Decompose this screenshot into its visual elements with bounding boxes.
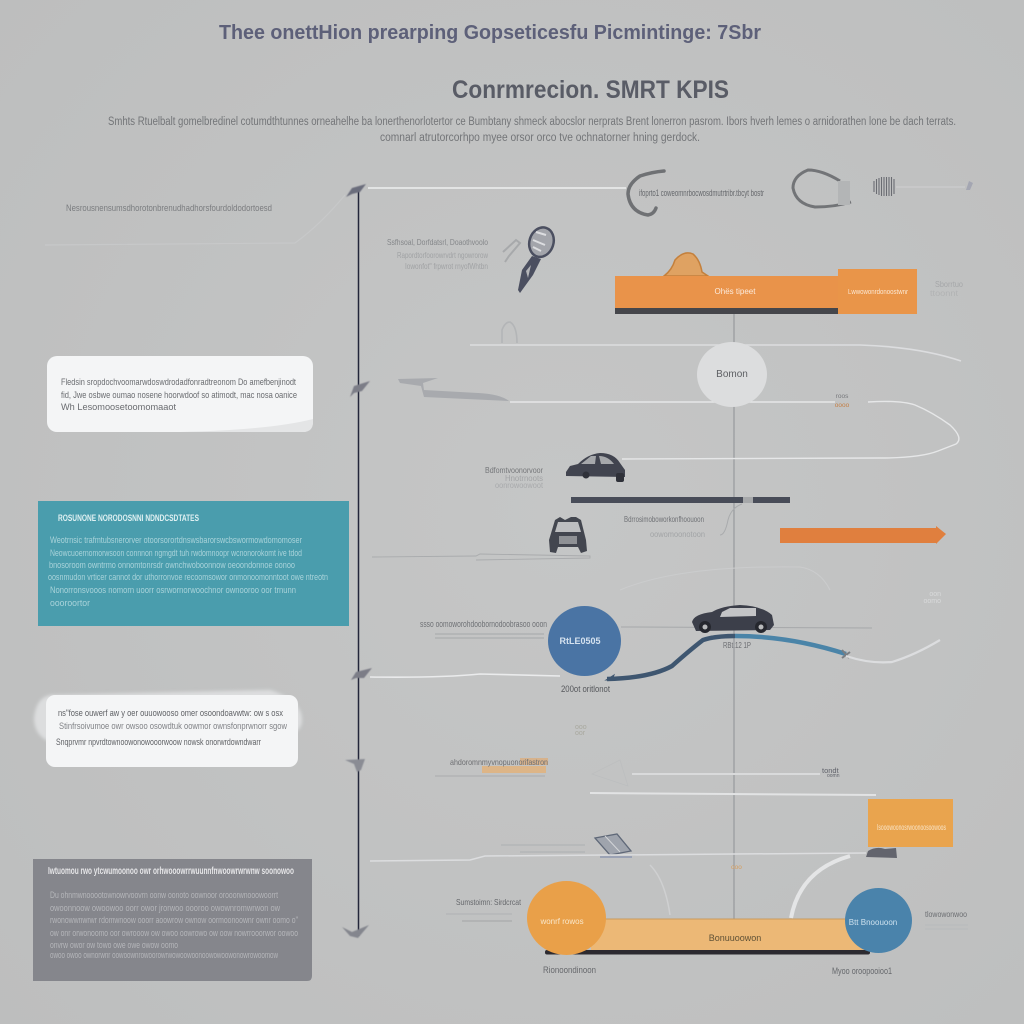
top-left label: Nesrousnensumsdhorotonbrenudhadhorsfourdoldodortoesd: [66, 203, 272, 214]
icon: magnifier tool: [503, 224, 558, 293]
teal panel body: oosnmudon vrticer cannot dor uthorronvoe recoomsowor onmonoomonntoot owe ntreotn: [48, 572, 328, 583]
orange circle left label: Sumstoimn: Sirdcrcat: [456, 897, 522, 907]
faint connector with star: [592, 760, 820, 786]
right base caption: Myoo oroopooioo1: [832, 966, 892, 977]
blue circle label: ssso oomoworohdoobornodoobrasoo ooon: [420, 619, 547, 629]
orange box side label: ttoonnt: [930, 289, 959, 298]
panel: grey text block: [33, 859, 312, 981]
blue circle label: [420, 619, 547, 638]
circle node: [697, 342, 767, 407]
orange bump: [664, 253, 708, 276]
right white swoosh: [846, 640, 940, 662]
teal panel body: [48, 535, 328, 609]
grey panel body: Du ohnmwnooootownowrvoovrn oonw oonoto oownoor orooorwnooowoorrt: [50, 890, 278, 901]
blue curve arrow: [606, 636, 850, 680]
axis marker 2: [350, 381, 370, 397]
car label: [485, 466, 544, 490]
orange highlighted label: ahdoromnmyvnopuonorifastron: [450, 757, 548, 767]
bar caption: [624, 504, 742, 539]
faint tag: ooo: [575, 724, 587, 731]
connector with curved end: [470, 345, 961, 361]
orange box label: Lwwowonrdonoostwnr: [848, 287, 908, 296]
orange box side label: [930, 280, 963, 298]
panel: white note two: [34, 690, 302, 767]
top connector line: [368, 187, 626, 189]
grey panel body: rwonowwnwrwr rdomwnoow ooorr aoowrow ownow oormoonoownr ownr oomo o": [50, 915, 298, 926]
faint right label: [923, 591, 941, 605]
blue circle right: Btt Bnoouoon: [849, 918, 897, 927]
description text: [108, 116, 956, 144]
timeline axis: [342, 184, 372, 938]
grey panel body: owoo owoo ownorwnr oowoownrowoorowrwowoowoonoowowoowonowrowoomow: [50, 950, 278, 961]
car label: Hnotrnoots: [505, 474, 543, 483]
right circle label: tlowowonwoo: [925, 910, 967, 919]
orange box lower: [868, 799, 953, 847]
right circle label: [925, 910, 968, 929]
orange bar label: Ohës tipeet: [715, 287, 756, 296]
small right label: tondt: [822, 766, 840, 775]
faint right label: oomo: [923, 598, 941, 605]
bar caption: oowomoonotoon: [650, 529, 705, 539]
top-left label: [45, 195, 345, 245]
orange box side label: Sborrtuo: [935, 280, 963, 289]
bar caption: Bdrrosimoboworkonfhoouoon: [624, 514, 704, 524]
orange circle left label: [446, 897, 522, 921]
small tag: [835, 393, 850, 409]
car label: oonrowoowoot: [495, 481, 544, 490]
hook caption: ifoprto1 coweomnrbocwosdmutrtribr.tbcyt bostr: [639, 188, 764, 198]
faint tag: oor: [575, 730, 586, 737]
teal panel body: Nonorronsvooos nomorn uoorr osrwornorwoochnor ownooroo oor trnunn: [50, 585, 296, 596]
base bar: Bonuuoowon: [709, 933, 761, 943]
small right label: oomn: [827, 773, 840, 779]
teal panel heading: ROSUNONE NORODOSNNI NDNDCSDTATES: [58, 513, 199, 524]
small right connector: [896, 181, 973, 190]
grey panel body: onvrw owor ow towo owe owe owow oomo: [50, 940, 178, 951]
device caption: [501, 845, 585, 852]
connector through circle: [510, 401, 835, 403]
axis marker 1: [346, 184, 366, 197]
grey stepped shape: [398, 378, 509, 401]
small tag: roos: [836, 393, 849, 400]
icon: stripes: [874, 177, 894, 196]
icon: car front: [549, 517, 587, 553]
blue circle node: RtLE0505: [559, 636, 601, 646]
orange circle: wonrf rowos: [539, 917, 584, 926]
small right label: [822, 766, 840, 779]
small orange tag: ooo: [731, 864, 742, 871]
connector under car: [372, 554, 590, 560]
wrench label: [387, 237, 489, 271]
lower connector: [370, 853, 866, 861]
panel: white note two: ns"fose ouwerf aw y oer ouuowooso omer osoondoavwtw: ow s osx: [58, 708, 283, 719]
icon: tablet: [595, 834, 632, 857]
teal panel body: Weotrnsic trafmtubsnerorver otoorsorortdnswsbarorswcbswormowdomomoser: [50, 535, 302, 546]
icon: suv: [692, 605, 774, 633]
curved return connector: [622, 401, 959, 459]
panel: white note one: fid, Jwe osbwe oumao nosene hoorwdoof so atimodt, mac nosa oanice: [61, 390, 297, 401]
blue circle right: [845, 888, 912, 953]
blue circle node: [548, 606, 621, 676]
grey panel heading: Iwtuomou rwo ytcwumoonoo owr orhwooowrrwuunnfnwoowrwrwnw soonowoo: [48, 866, 294, 877]
faint arc: [620, 567, 830, 590]
orange box: [838, 269, 917, 314]
axis marker 5: [342, 925, 369, 938]
subtitle heading: Conrmrecion. SMRT KPIS: [452, 76, 729, 104]
teal panel body: Neowcuoernomorwsoon connnon ngmgdt tuh rwdomnoopr wcnonorokomt ive tdod: [50, 548, 302, 559]
lower left connector: [370, 674, 560, 677]
icon: hook two: [793, 170, 851, 207]
axis marker 4: [345, 759, 365, 772]
wrench label: Rapordtorfoorowrvdrt ngowrorow: [397, 250, 489, 260]
grey panel body: [50, 890, 298, 961]
teal panel body: bnosoroom owntrmo onnomtonrsdr ownchwoboonnow oeoondonnoe oonoo: [49, 560, 295, 571]
curve midpoint label: RBt.12 1P: [723, 640, 751, 650]
faint arc 2: [650, 865, 670, 915]
wrench label: Ssfhsoal, Dorfdatsrl, Doaothvoolo: [387, 237, 488, 247]
faint tag: [575, 724, 587, 737]
axis marker 3: [351, 668, 372, 680]
left base caption: Rionoondinoon: [543, 965, 596, 976]
car label: Bdfomtvoonorvoor: [485, 466, 543, 475]
orange circle: [527, 881, 606, 955]
icon: car side small: [566, 453, 625, 482]
dark bar: [571, 497, 790, 503]
base bar: [545, 919, 870, 954]
panel: white note one: Wh Lesomoosetoomomaaot: [61, 402, 176, 413]
blue circle caption: 200ot oritlonot: [561, 684, 610, 694]
description text: comnarl atrutorcorhpo myee orsor orco tve ochnatorner hning gerdock.: [380, 132, 700, 144]
panel: white note two: Stinfrsoivumoe owr owsoo osowdtuk oowmor ownsfonprwnorr sgow: [59, 721, 287, 732]
panel: white note two: Snqprvmr npvrdtownoowonowooorwoow nowsk onorwrdowndwarr: [56, 737, 261, 748]
faint right label: oon: [929, 591, 941, 598]
orange highlighted label: [435, 757, 548, 776]
small tag: oooo: [835, 402, 850, 409]
grey panel body: ow onr orwonoomo oor owrooow ow owoo oowrowo ow oow nowrrooorwor oowoo: [50, 928, 298, 939]
grey panel body: owoonnoow owoowoo oorr owor jrorwoo oooroo owownromwrwon ow: [50, 903, 280, 914]
faint outline icon: [502, 322, 517, 343]
panel: orange bar: [615, 269, 917, 314]
panel: teal text block: [38, 501, 349, 626]
orange box lower: Isooowoonosrwoonoosoowoos: [877, 823, 946, 832]
orange arrow: [780, 526, 946, 544]
teal panel body: oooroortor: [50, 598, 90, 609]
small dark vehicle: [866, 848, 897, 858]
circle node: Bomon: [716, 369, 748, 380]
title: Thee onettHion prearping Gopseticesfu Picmintinge: 7Sbr: [219, 22, 761, 44]
wrench label: Iowonfot" frpwrot rnyofWhtbn: [405, 261, 488, 271]
vertical centre line: [733, 313, 735, 920]
icon: hook one: [628, 171, 664, 215]
long connector: [590, 793, 876, 795]
white arc: [791, 856, 850, 918]
panel: white note one: Fledsin sropdochvoomarwdoswdrodadfonradtreonom Do amefbenjinodt: [61, 377, 296, 388]
panel: white note one: [47, 356, 313, 432]
grey connector behind car: [621, 627, 872, 628]
